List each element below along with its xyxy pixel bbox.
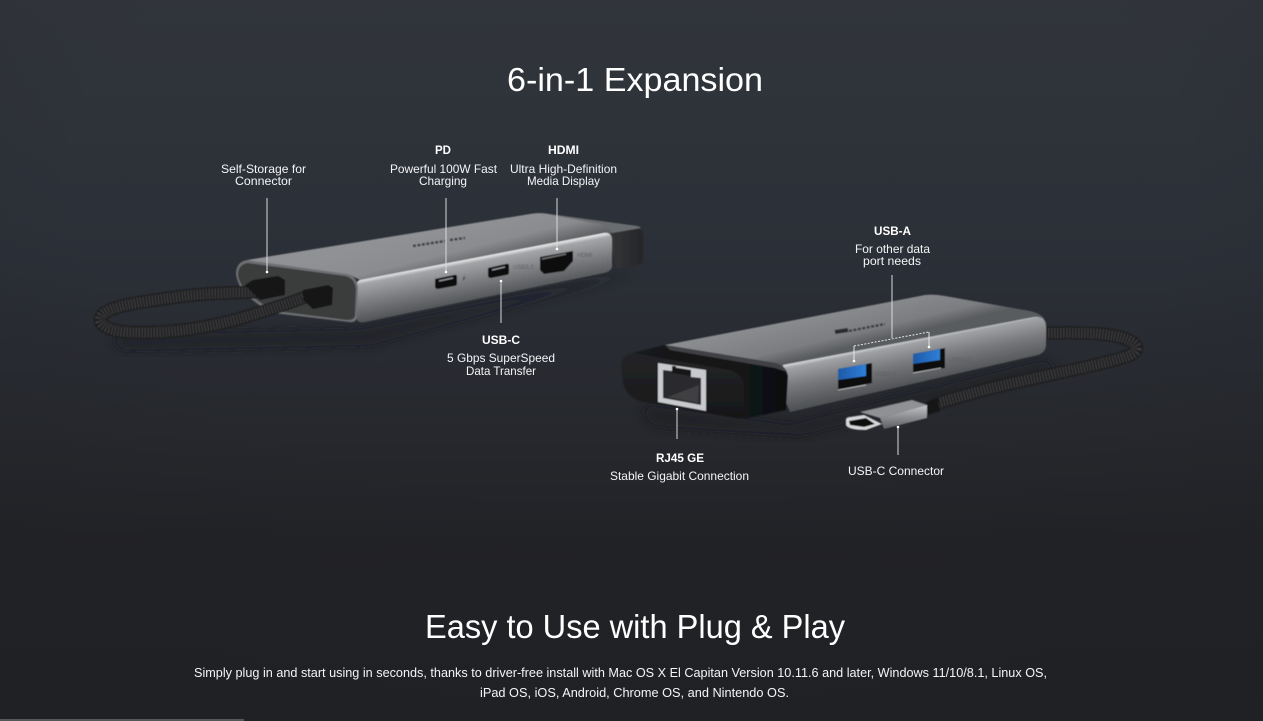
callout: HDMI <box>510 143 617 250</box>
product: hub, HDMI side: HDMI <box>577 253 593 259</box>
port: USB-A 2: USB3.0 <box>949 358 970 364</box>
body text: Simply plug in and start using in seconds, thanks to driver-free install with Mac OS X El Capitan Version 10.11.6 and later, Windows 11/10/8.1, Linux OS, <box>194 665 1047 680</box>
title: 6-in-1 Expansion: 6-in-1 Expansion <box>507 61 763 98</box>
port: HDMI <box>540 251 573 274</box>
shadow <box>640 360 1060 435</box>
top surface <box>247 213 611 280</box>
port: USB-A 2 <box>913 348 970 373</box>
black side of cap <box>632 345 788 419</box>
callout: Self-Storage for Connector <box>221 162 306 273</box>
callout: RJ45 GE: Stable Gigabit Connection <box>610 469 749 483</box>
body text: iPad OS, iOS, Android, Chrome OS, and Nintendo OS. <box>480 685 789 700</box>
heading: Easy to Use with Plug & Play: Easy to Use with Plug & Play <box>425 608 845 645</box>
front face <box>783 317 1046 412</box>
callout: USB-A: USB-A <box>874 224 911 238</box>
callout: RJ45 GE: RJ45 GE <box>656 451 704 465</box>
callout: PD <box>390 143 498 273</box>
USB-C connector <box>846 398 940 430</box>
product: hub, HDMI side: USB3.0 <box>513 265 534 271</box>
product: hub, RJ45 side <box>621 295 1137 435</box>
callout: PD: Powerful 100W Fast <box>390 162 498 176</box>
top surface <box>665 295 1044 367</box>
callout: USB-A: For other data <box>855 242 930 256</box>
callout: HDMI: HDMI <box>548 143 579 157</box>
callout: PD: PD <box>435 143 451 157</box>
body text <box>194 665 1047 700</box>
black end face <box>621 353 744 418</box>
port: USB-C <box>488 264 509 278</box>
callout: USB-A: port needs <box>863 254 921 268</box>
front face <box>356 233 612 322</box>
callout: USB-C: 5 Gbps SuperSpeed <box>447 351 555 365</box>
product: hub, HDMI side <box>100 213 643 350</box>
callout: USB-C: USB-C <box>482 333 520 347</box>
callout: HDMI: Media Display <box>527 174 600 188</box>
end face <box>236 260 358 322</box>
callout: HDMI: Ultra High-Definition <box>510 162 617 176</box>
port: RJ45 <box>658 363 706 411</box>
callout: USB-C: Data Transfer <box>466 364 536 378</box>
callout: RJ45 GE <box>610 408 749 483</box>
callout: PD: Charging <box>419 174 467 188</box>
end cap behind <box>537 213 643 269</box>
callout: USB-C <box>447 280 555 378</box>
port: USB-A 1: USB3.0 <box>875 372 896 378</box>
callout: Self-Storage for Connector: Connector <box>235 174 292 188</box>
cable loop <box>100 292 305 333</box>
port: PD USB-C <box>435 275 457 289</box>
callout: USB-C Connector: USB-C Connector <box>848 464 944 478</box>
callout: USB-C Connector <box>848 426 944 478</box>
port: USB-A 1 <box>838 363 896 390</box>
callout: Self-Storage for Connector: Self-Storage for <box>221 162 306 176</box>
shadow <box>110 272 640 350</box>
logo <box>835 330 848 332</box>
callout: USB-A <box>853 224 930 362</box>
cable plugs <box>245 276 285 300</box>
cable <box>935 333 1137 404</box>
logo <box>413 238 465 246</box>
